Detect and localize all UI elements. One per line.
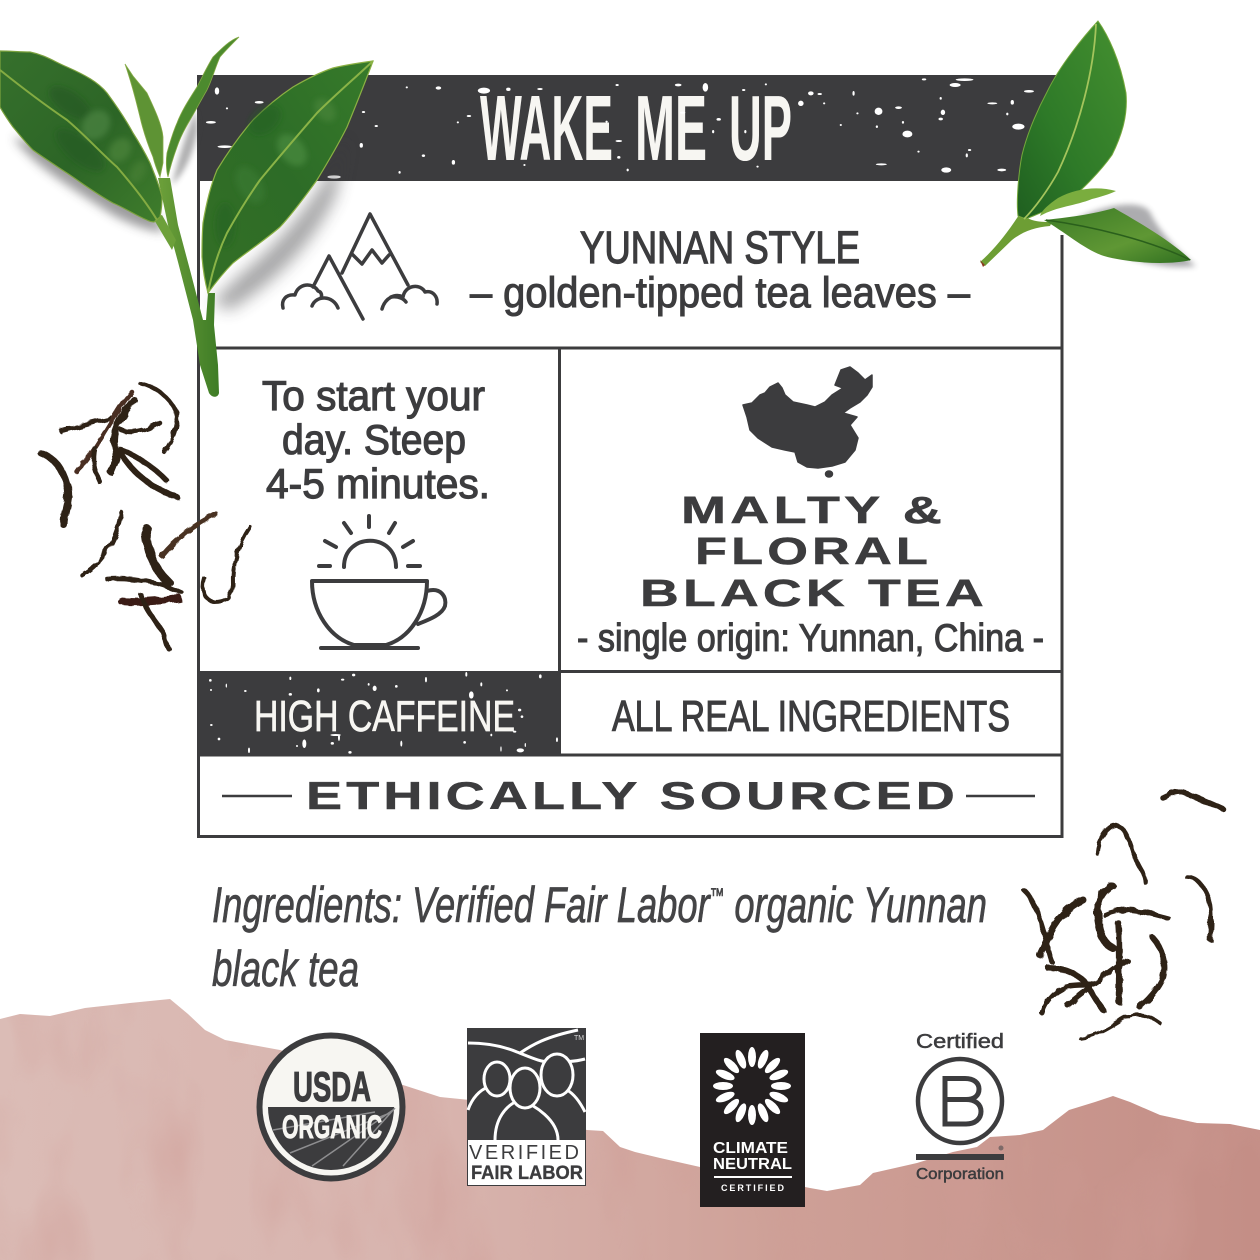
illustration: loose tea leaves right [1024, 792, 1223, 1038]
text block: malty and floral black tea: MALTY & [681, 490, 946, 532]
text block: ingredients: ™ [710, 885, 724, 907]
leaf: lower [1044, 208, 1191, 263]
bud: center [125, 64, 163, 177]
text block: malty and floral black tea [640, 490, 988, 615]
badge: climate neutral certified [700, 1033, 805, 1207]
climate neutral wordmark: NEUTRAL [713, 1156, 792, 1173]
text block: ingredients [212, 877, 987, 997]
header speckle texture [206, 78, 1034, 179]
icon: sunrise over tea cup [312, 516, 445, 648]
text block: steep instructions: 4-5 minutes. [266, 460, 490, 507]
badge: certified B corporation [916, 1031, 1004, 1183]
text block: steep instructions: day. Steep [282, 416, 466, 463]
text block: ingredients: Ingredients: Verified Fair Labor [212, 877, 897, 933]
text block: steep instructions [262, 372, 490, 507]
illustration: tea sprig right [980, 21, 1196, 267]
speckle texture [209, 672, 558, 754]
organic wordmark: ORGANIC [282, 1109, 382, 1145]
header band: wake me up: UP [729, 76, 792, 180]
verified wordmark: VERIFIED [469, 1142, 583, 1164]
label: ethically sourced: ETHICALLY SOURCED [306, 775, 959, 818]
icon: mountains with clouds [283, 214, 437, 319]
text block: malty and floral black tea: BLACK TEA [640, 573, 988, 615]
text block: ingredients: organic Yunnan [724, 877, 987, 933]
leaf: large [1017, 21, 1126, 219]
illustration: tea sprig left [0, 37, 373, 397]
header band: wake me up [197, 75, 1062, 181]
subheading: single origin: - single origin: Yunnan, China - [577, 617, 1044, 660]
badge: verified fair labor [468, 1028, 586, 1186]
leaf: upper left [0, 51, 162, 222]
text block: malty and floral black tea: FLORAL [695, 531, 932, 573]
text block: steep instructions: To start your [262, 372, 485, 419]
left leaf vein shading [44, 80, 150, 186]
certified wordmark: CERTIFIED [721, 1183, 784, 1193]
USDA wordmark: USDA [293, 1063, 371, 1110]
leaf: large right [202, 61, 373, 293]
B letter [945, 1078, 981, 1124]
background: torn pink watercolor paper [0, 999, 1260, 1260]
header heading: WAKE [480, 76, 613, 180]
label: all real ingredients: ALL REAL INGREDIENTS [612, 692, 1010, 741]
heading: yunnan style: YUNNAN STYLE [580, 222, 860, 273]
climate neutral wordmark [713, 1140, 792, 1173]
shadows [13, 110, 347, 310]
fair labor wordmark: FAIR LABOR [471, 1163, 583, 1184]
bud: tall [166, 37, 239, 177]
certified wordmark: Certified [916, 1031, 1004, 1053]
climate neutral wordmark: CLIMATE [713, 1140, 788, 1157]
right leaf vein shading [215, 94, 340, 247]
illustration: loose tea leaves left [41, 383, 250, 648]
stem [980, 215, 1052, 266]
header heading: ME [635, 76, 707, 180]
sunburst [713, 1047, 791, 1125]
stem [158, 178, 219, 397]
trademark: TM [574, 1035, 584, 1042]
subheading: golden-tipped tea leaves: – golden-tipped tea leaves – [470, 269, 970, 317]
text block: ingredients: black tea [212, 941, 359, 997]
leaf: small light [1040, 188, 1116, 216]
badge cell: high caffeine [199, 671, 561, 755]
panel: product info frame [198, 181, 1062, 836]
label: high caffeine: HIGH CAFFEINE [254, 692, 515, 741]
icon: map of China [743, 367, 872, 477]
badge: USDA organic [260, 1036, 402, 1178]
corporation wordmark: Corporation [916, 1166, 1004, 1183]
